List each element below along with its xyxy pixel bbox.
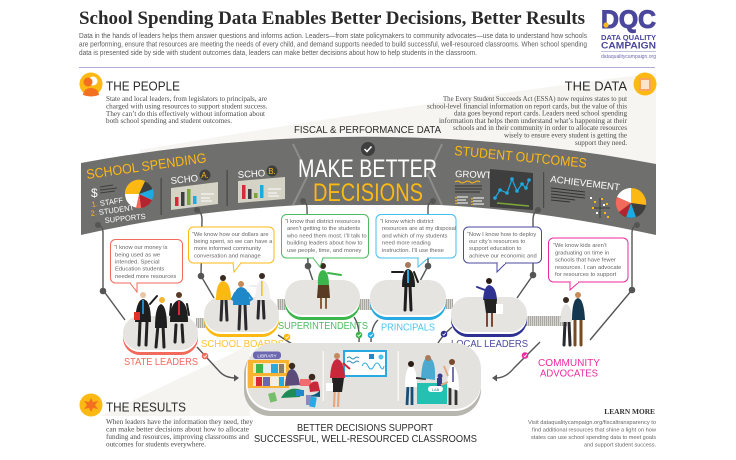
text: the data: school-level financial information on report cards, but the value of this <box>427 103 627 110</box>
logo <box>601 6 656 60</box>
bubble: superintendents: aren’t getting to the students <box>287 226 360 232</box>
text: the results: can make better decisions about how to allocate <box>106 426 249 434</box>
intro text <box>79 33 587 57</box>
bubble: community advocates: graduating on time in <box>555 250 609 256</box>
school A label <box>170 170 210 187</box>
heading: the data: THE DATA <box>565 78 627 94</box>
heading: student outcomes: STUDENT OUTCOMES <box>454 143 588 171</box>
bubble: state leaders: needed more resources <box>115 274 176 280</box>
section: the data <box>427 72 656 147</box>
text: the data: data goes beyond report cards. Leaders need school spending <box>454 111 628 118</box>
text: the data: schools and in their community in order to allocate resources <box>453 125 627 132</box>
learn more <box>528 407 657 448</box>
arrow: school boards to classroom <box>278 334 292 344</box>
heading: school spending: SCHOOL SPENDING <box>85 150 207 182</box>
bubble: principals: resources are at my disposal <box>382 226 456 232</box>
staff list: 1. STAFF <box>91 196 124 209</box>
staff list: SUPPORTS <box>104 212 146 225</box>
bubble: community advocates <box>548 238 628 290</box>
text: the data: The Every Student Succeeds Act (ESSA) now requires states to put <box>443 96 627 103</box>
figures: community advocates <box>560 292 585 345</box>
leader labels: ADVOCATES <box>540 368 598 380</box>
text: the people: They can’t do this effectively without information about <box>106 111 265 118</box>
arrow: principals to classroom <box>368 320 378 342</box>
text: the results: When leaders have the information they need, they <box>106 419 254 426</box>
connector: superintendents <box>300 198 313 281</box>
staff list: $ <box>91 186 98 200</box>
icon: check <box>361 142 375 156</box>
school B label: SCHO <box>237 168 266 181</box>
text: the results: outcomes for students everywhere. <box>106 442 206 448</box>
background wedge: results <box>100 345 250 416</box>
learn more: Visit dataqualitycampaign.org/fiscaltransparency to <box>528 420 656 426</box>
bubble: school boards: being spent, so we can have a <box>194 239 273 245</box>
leader labels: SUPERINTENDENTS <box>278 321 368 332</box>
bubble: school boards: conversation and manage <box>194 254 261 260</box>
text: the people: both school spending and student outcomes. <box>106 118 232 125</box>
chevrons <box>293 144 442 205</box>
connector: principals <box>420 198 436 281</box>
icon: people <box>80 72 102 96</box>
connector: school boards <box>194 207 214 298</box>
library scene <box>248 352 320 407</box>
leader labels <box>124 321 600 380</box>
bubble: school boards: “We know how our dollars are <box>192 232 269 238</box>
staff list <box>90 185 146 225</box>
platform: local leaders <box>451 297 527 337</box>
platform: superintendents <box>285 280 360 320</box>
section: the people <box>80 72 268 125</box>
background wedge: data <box>140 73 656 170</box>
panel: student outcomes <box>454 143 646 218</box>
learn more: and support student success. <box>584 442 656 448</box>
bubble: superintendents: who need them most. I’ll talk to <box>286 234 367 240</box>
arrow: state leaders to classroom <box>197 347 239 382</box>
leader labels: SCHOOL BOARDS <box>201 339 284 350</box>
intro text: Data in the hands of leaders helps them answer questions and informs action. Leaders—from state policymakers to community advocates—use data to understand how schools <box>79 33 587 40</box>
leader labels: PRINCIPALS <box>381 322 435 334</box>
figures: state leaders <box>134 292 189 347</box>
bubble: state leaders <box>110 240 182 292</box>
learn more: find additional resources that shine a light on how <box>532 428 657 434</box>
bar chart: school A <box>171 182 218 210</box>
bubble: principals: need more reading <box>382 240 431 246</box>
intro text: are performing, ensure that resources are meeting the needs of every child, and demand supports needed to build successful, well-resourced classrooms. When school spending <box>79 42 587 48</box>
logo: DATA QUALITY <box>601 33 656 42</box>
text: the data: wisely to ensure every student is getting the <box>504 132 627 140</box>
logo: dataqualitycampaign.org <box>601 54 656 60</box>
figures: school boards <box>216 273 270 329</box>
heading: better decisions support: BETTER DECISIONS SUPPORT <box>297 422 434 434</box>
leader labels: LOCAL LEADERS <box>451 339 528 350</box>
achievement label: ACHIEVEMENT <box>550 174 621 194</box>
bubble: superintendents <box>282 214 368 267</box>
platform: principals <box>370 280 446 320</box>
achievement text lines <box>551 188 585 202</box>
heading: the people: THE PEOPLE <box>106 78 180 94</box>
connector: local leaders <box>517 207 541 298</box>
school A label: A. <box>201 171 209 180</box>
bubble: local leaders: “Now I know how to deploy <box>467 232 536 238</box>
lab scene: LAB <box>432 387 440 392</box>
growth label: GROWT <box>455 169 492 181</box>
text: the data: information that helps them understand what’s happening at their <box>439 118 628 125</box>
figure: local leader <box>477 278 503 326</box>
bubble: school boards: more informed community <box>194 246 261 252</box>
heading: make better decisions: DECISIONS <box>313 179 423 207</box>
intro text: data is presented side by side with student outcomes data, leaders can make better decisions about how to help students in the classroom. <box>79 50 477 57</box>
school A label: SCHO <box>170 173 199 187</box>
bubble: superintendents: “I know that district resources <box>285 219 360 225</box>
connector: community advocates <box>590 222 640 340</box>
panel: school spending <box>85 150 285 225</box>
bubble: principals: “I know which district <box>380 219 434 225</box>
heading: make better decisions <box>298 155 437 207</box>
pie chart: school spending <box>125 180 154 208</box>
text: the results <box>106 419 254 448</box>
section: the results <box>80 394 254 448</box>
bubble: community advocates: schools that have fewer <box>555 258 616 264</box>
text: the data <box>427 96 628 147</box>
heading: better decisions support: SUCCESSFUL, WELL-RESOURCED CLASSROOMS <box>254 433 477 445</box>
bubble: school boards <box>188 227 274 272</box>
bubble: principals <box>376 214 456 267</box>
bubble: local leaders: support education to <box>469 246 522 252</box>
leader labels: COMMUNITY <box>538 358 600 369</box>
logo: DQC <box>601 6 656 34</box>
library scene: LIBRARY <box>257 354 277 358</box>
logo: CAMPAIGN <box>601 40 656 52</box>
bubble: local leaders: achieve our economic and <box>469 254 537 260</box>
school B label <box>237 166 278 181</box>
arrow: community advocates to classroom <box>492 342 540 382</box>
heading: better decisions support <box>254 422 477 445</box>
bubble: state leaders: Education students <box>115 266 164 272</box>
text: the people: charged with using resources to support student success. <box>106 104 268 110</box>
bubble: state leaders: intended. Special <box>115 260 159 266</box>
bubble: state leaders: being used as we <box>115 252 160 258</box>
text: the people <box>106 96 268 125</box>
title: School Spending Data Enables Better Decisions, Better Results <box>79 9 585 29</box>
bubble: superintendents: building leaders about how to <box>287 240 362 246</box>
bubble: state leaders: “I know our money is <box>114 245 168 251</box>
heading: fiscal & performance data: FISCAL & PERFORMANCE DATA <box>294 125 441 136</box>
bubble: local leaders: our city’s resources to <box>469 239 525 245</box>
bar chart: school B <box>238 177 285 203</box>
figure: superintendent <box>317 263 341 308</box>
bubble: local leaders <box>464 227 542 272</box>
connector: state leaders <box>95 222 125 320</box>
icon: data report <box>634 72 656 96</box>
bubble: community advocates: resources. I can advocate <box>555 265 621 271</box>
pie chart: achievement <box>616 188 646 218</box>
gray band <box>81 137 656 235</box>
bubble: principals: instruction. I’ll use these <box>382 248 444 254</box>
scatter plot <box>590 197 610 218</box>
teacher and whiteboard scene <box>326 350 387 407</box>
learn more: LEARN MORE <box>604 407 655 416</box>
arrow: local leaders to classroom <box>438 327 452 343</box>
lab scene <box>405 355 459 405</box>
platform: state leaders <box>123 316 198 355</box>
staff list: 2. STUDENT <box>90 203 135 218</box>
text: the results: funding and resources, improving classrooms and <box>106 434 250 441</box>
leader labels: STATE LEADERS <box>124 357 198 368</box>
line chart: growth <box>490 169 533 210</box>
figure: principal <box>392 262 418 310</box>
bubble: community advocates: for resources to support <box>555 272 617 278</box>
growth legend <box>455 181 484 205</box>
arrow: superintendents to classroom <box>354 317 362 342</box>
bubble: principals: and which of my students <box>382 234 448 240</box>
text: the data: support they need. <box>575 140 627 147</box>
learn more: states can use school spending data to meet goals <box>531 435 656 441</box>
heading: the results: THE RESULTS <box>106 400 186 414</box>
heading: make better decisions: MAKE BETTER <box>298 155 437 183</box>
platform: school boards <box>204 297 279 337</box>
main classroom platform <box>244 343 481 416</box>
bubble: community advocates: “We know kids aren’t <box>553 243 607 249</box>
platform connector stripes <box>196 299 567 328</box>
school B label: B. <box>268 167 276 176</box>
icon: results star <box>80 394 102 416</box>
bubble: superintendents: use people, time, and money <box>287 248 362 254</box>
text: the people: State and local leaders, from legislators to principals, are <box>106 96 267 103</box>
